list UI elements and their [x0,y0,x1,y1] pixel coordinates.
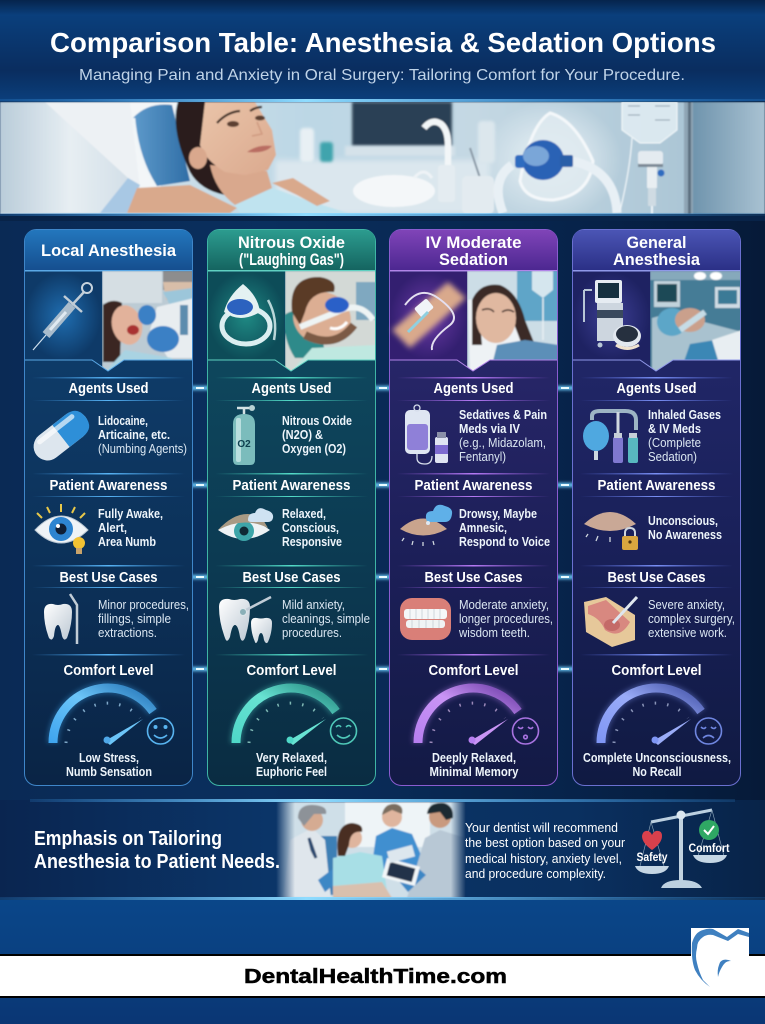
section: Comfort Level: Minimal Memory [430,765,519,779]
heading: Sedation [439,250,508,269]
header band [0,0,765,101]
section: Comfort Level [32,654,185,779]
section: Best Use Cases: Best Use Cases [424,570,522,586]
section: Agents Used: (e.g., Midazolam, [459,436,546,450]
heading: Local Anesthesia [41,241,177,260]
panel: Nitrous Oxide [208,230,377,786]
section: Patient Awareness: Unconscious, [648,514,718,528]
icon: dentures [400,598,451,640]
section: Best Use Cases: Best Use Cases [608,570,706,586]
section: Agents Used: (N2O) & [282,428,323,442]
section: Agents Used: (Complete [648,436,701,450]
section: Best Use Cases [580,565,735,647]
section: Best Use Cases [32,565,189,644]
icon: anesthesia machine [573,272,650,360]
photo: dentist treating patient [102,271,194,373]
section: Comfort Level: No Recall [632,765,682,779]
section: Comfort Level: Comfort Level [612,663,702,679]
logo: tooth [691,928,749,987]
bottom banner [0,799,765,900]
photo: patient under general anesthesia [650,271,742,373]
section: Patient Awareness: Responsive [282,535,342,549]
section: Agents Used: & IV Meds [648,422,701,436]
icon: closed eye with padlock [584,512,638,550]
section: Best Use Cases: Best Use Cases [60,570,158,586]
section: Best Use Cases: procedures. [282,626,342,640]
icon: breathing bag and vials [583,411,638,463]
section: Patient Awareness: Alert, [98,521,127,535]
section: Patient Awareness: Patient Awareness [50,478,168,494]
title: Comparison Table: Anesthesia & Sedation Options [50,27,716,58]
heading: Anesthesia [613,250,701,269]
section: Agents Used: Lidocaine, [98,414,148,428]
panel: IV Moderate Sedation [390,230,559,786]
banner headline: Anesthesia to Patient Needs. [34,851,280,873]
section: Agents Used: (Numbing Agents) [98,442,187,456]
section: Best Use Cases: Severe anxiety, [648,598,725,612]
behind-coat [127,102,177,190]
section: Agents Used: Oxygen (O2) [282,442,346,456]
section: Comfort Level: Euphoric Feel [256,765,327,779]
section: Best Use Cases: Moderate anxiety, [459,598,549,612]
gauge [601,688,722,745]
recommendation text: Your dentist will recommend [465,820,618,835]
recommendation text: the best option based on your [465,835,626,850]
section: Agents Used: Agents Used [68,381,148,397]
glow lines around hero [0,99,765,221]
section: Agents Used: Nitrous Oxide [282,414,352,428]
icon: drowsy closed eye with cloud [400,505,452,546]
icon: tooth and probe [44,594,77,644]
section: Best Use Cases: Mild anxiety, [282,598,345,612]
heading: IV Moderate [426,233,522,252]
icon: balance scale with Safety and Comfort: Comfort [688,841,730,855]
section: Agents Used: Fentanyl) [459,450,506,464]
panel: General Anesthesia [572,230,742,786]
section: Patient Awareness [397,473,550,549]
icon: balance scale with Safety and Comfort [635,810,730,888]
section: Patient Awareness: Relaxed, [282,507,326,521]
brand strip: DentalHealthTime.com [244,966,507,988]
section: Agents Used: Agents Used [252,381,332,397]
heading [426,233,522,269]
section: Comfort Level: Complete Unconsciousness, [583,751,731,765]
section: Patient Awareness: Amnesic, [459,521,507,535]
hero photo: patient, nitrous mask and IV bag [0,100,765,220]
section: Patient Awareness: Patient Awareness [414,478,532,494]
section: Best Use Cases: extractions. [98,626,157,640]
gauge [418,688,538,745]
section: Patient Awareness: Patient Awareness [232,478,350,494]
icon: oxygen cylinder: O2 [237,439,251,450]
section: Agents Used: Sedation) [648,450,697,464]
section: Patient Awareness: Respond to Voice [459,535,550,549]
section: Comfort Level: Low Stress, [79,751,139,765]
heading: ("Laughing Gas") [239,250,344,269]
section: Comfort Level [397,654,550,779]
section: Best Use Cases: fillings, simple [98,612,171,626]
photo: sedated patient [467,271,559,373]
section: Comfort Level: Deeply Relaxed, [432,751,516,765]
section: Agents Used: Agents Used [434,381,514,397]
icon: unconscious face [696,718,722,744]
icon: syringe [25,272,101,360]
section: Agents Used: Meds via IV [459,422,521,436]
section: Patient Awareness: Patient Awareness [598,478,716,494]
banner headline: Emphasis on Tailoring [34,828,222,850]
icon: sleepy face [512,718,538,744]
panel: Local Anesthesia [24,230,194,786]
section: Agents Used [28,377,187,466]
icon: IV bag and vial [405,405,448,464]
section: Agents Used: Agents Used [616,381,696,397]
heading: General [626,233,686,252]
photo: relaxed patient with nasal mask [284,271,377,373]
heading [613,233,701,269]
section: Agents Used: Inhaled Gases [648,408,721,422]
section: Patient Awareness: Fully Awake, [98,507,163,521]
icon: happy face [330,718,356,744]
icon: teeth and mirror [219,597,272,643]
section: Comfort Level [215,654,368,779]
icon: open eye with bulb [35,504,88,554]
icon: half-lidded eye with cloud [218,508,273,541]
section: Best Use Cases: wisdom teeth. [458,626,530,640]
section: Comfort Level: Comfort Level [246,663,336,679]
section: Agents Used: Articaine, etc. [98,428,170,442]
section: Comfort Level: Numb Sensation [66,765,152,779]
icon: nitrous mask [208,272,284,360]
section: Agents Used [397,377,550,464]
icon: capsule [28,406,94,466]
section: Best Use Cases: complex surgery, [648,612,735,626]
section: Comfort Level: Comfort Level [64,663,154,679]
recommendation text: and procedure complexity. [465,866,606,881]
section: Patient Awareness: Conscious, [282,521,339,535]
section: Comfort Level: Very Relaxed, [256,751,327,765]
photo: dental team with patient [276,802,466,898]
icon: arm with IV line [390,272,467,360]
subtitle: Managing Pain and Anxiety in Oral Surgery: Tailoring Comfort for Your Procedure. [79,67,685,84]
section: Best Use Cases: Minor procedures, [98,598,189,612]
recommendation text: medical history, anxiety level, [465,851,622,866]
section: Agents Used [215,377,368,465]
icon: surgical tissue block [584,597,637,647]
connector glows [190,386,575,671]
section: Best Use Cases: Best Use Cases [242,570,340,586]
gauge [236,688,356,745]
section: Agents Used [580,377,733,464]
section: Comfort Level: Comfort Level [428,663,518,679]
gauge [53,688,174,745]
icon: oxygen cylinder [233,405,255,465]
section: Best Use Cases [397,565,553,640]
section: Best Use Cases: cleanings, simple [282,612,370,626]
section: Patient Awareness [32,473,185,554]
section: Agents Used: Sedatives & Pain [459,408,547,422]
blue footer band [0,900,765,1024]
icon: smiley [148,718,174,744]
IV bag [622,102,677,143]
section: Best Use Cases: longer procedures, [459,612,553,626]
section: Patient Awareness [580,473,733,550]
section: Comfort Level [580,654,733,779]
section: Patient Awareness [215,473,368,549]
banner headline [34,828,280,873]
section: Best Use Cases [215,565,370,643]
section: Best Use Cases: extensive work. [648,626,727,640]
section: Patient Awareness: Drowsy, Maybe [459,507,537,521]
section: Patient Awareness: No Awareness [648,528,722,542]
icon: balance scale with Safety and Comfort: Safety [636,850,668,864]
section: Patient Awareness: Area Numb [98,535,156,549]
brand strip [0,954,765,998]
heading [238,233,345,269]
recommendation text [465,820,626,881]
nitrous mask [520,113,593,200]
heading: Nitrous Oxide [238,233,345,252]
